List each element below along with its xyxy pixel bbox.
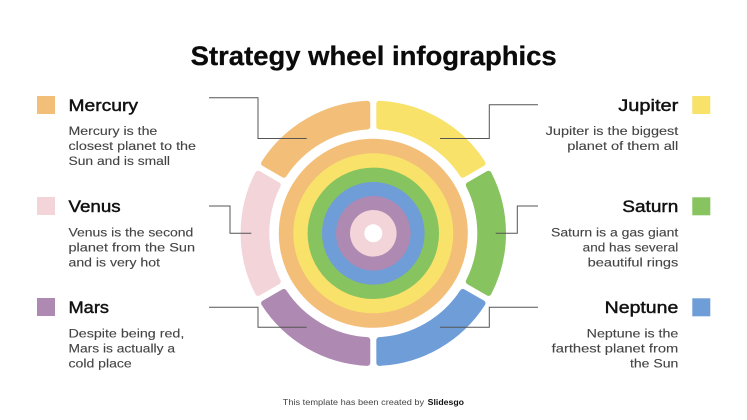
heading: Saturn: Saturn (622, 197, 678, 216)
heading: Neptune: Neptune (605, 298, 678, 317)
outer ring segments (207, 74, 540, 393)
panel: Jupiter (546, 96, 710, 153)
footer credit: This template has been created by (283, 398, 424, 407)
heading: Mercury: Mercury (68, 96, 139, 115)
leader line: Mars (209, 307, 307, 327)
text: Jupiter description (546, 124, 679, 153)
panel: Mercury (37, 96, 196, 168)
heading: Mars: Mars (68, 298, 109, 317)
colour key: Mars (37, 298, 55, 316)
colour key: Saturn (692, 197, 710, 215)
segment: Mercury (264, 74, 377, 199)
text: Neptune description: the Sun (630, 357, 678, 371)
text: Venus description: and is very hot (68, 256, 161, 270)
text: Neptune description (552, 327, 678, 371)
text: Mars description: Despite being red, (68, 327, 184, 341)
panel: Venus (37, 197, 195, 270)
text: Mercury description: Mercury is the (68, 124, 157, 138)
heading: Venus: Venus (68, 197, 121, 216)
footer credit (283, 398, 464, 407)
segment: Jupiter (379, 104, 482, 175)
text: Mars description: Mars is actually a (68, 342, 175, 356)
text: Jupiter description: Jupiter is the biggest (546, 124, 679, 138)
leader line: Venus (209, 206, 251, 233)
concentric rings (279, 139, 468, 328)
text: Mars description (68, 327, 184, 371)
text: Venus description: planet from the Sun (68, 241, 195, 255)
heading: Jupiter: Jupiter (618, 96, 679, 115)
colour key: Neptune (692, 298, 710, 316)
colour key: Jupiter (692, 96, 710, 114)
text: Saturn description (551, 226, 679, 270)
text: Venus description: Venus is the second (68, 226, 193, 240)
text: Saturn description: Saturn is a gas giant (551, 226, 679, 240)
text: Mercury description: closest planet to the (68, 139, 196, 153)
panel: Mars (37, 298, 184, 371)
text: Saturn description: and has several (583, 241, 678, 255)
leader line: Mercury (209, 98, 307, 138)
panel: Saturn (551, 197, 710, 270)
segment: Saturn (427, 174, 540, 299)
colour key: Venus (37, 197, 55, 215)
text: Saturn description: beautiful rings (588, 256, 678, 270)
text: Jupiter description: planet of them all (567, 139, 678, 153)
segment: Mars (264, 292, 367, 363)
wheel (207, 74, 540, 393)
segment: Venus (207, 168, 320, 293)
text: Mercury description: Sun and is small (68, 154, 170, 168)
text: Neptune description: farthest planet from (552, 342, 678, 356)
segment: Neptune (369, 268, 483, 393)
text: Mars description: cold place (68, 357, 132, 371)
footer credit: Slidesgo (428, 398, 464, 407)
text: Mercury description (68, 124, 196, 168)
colour key: Mercury (37, 96, 55, 114)
leader line: Neptune (440, 307, 538, 327)
leader line: Saturn (496, 206, 538, 233)
text: Venus description (68, 226, 195, 270)
panel: Neptune (552, 298, 710, 371)
leader line: Jupiter (440, 105, 538, 138)
title: Strategy wheel infographics (191, 41, 557, 71)
text: Neptune description: Neptune is the (587, 327, 678, 341)
